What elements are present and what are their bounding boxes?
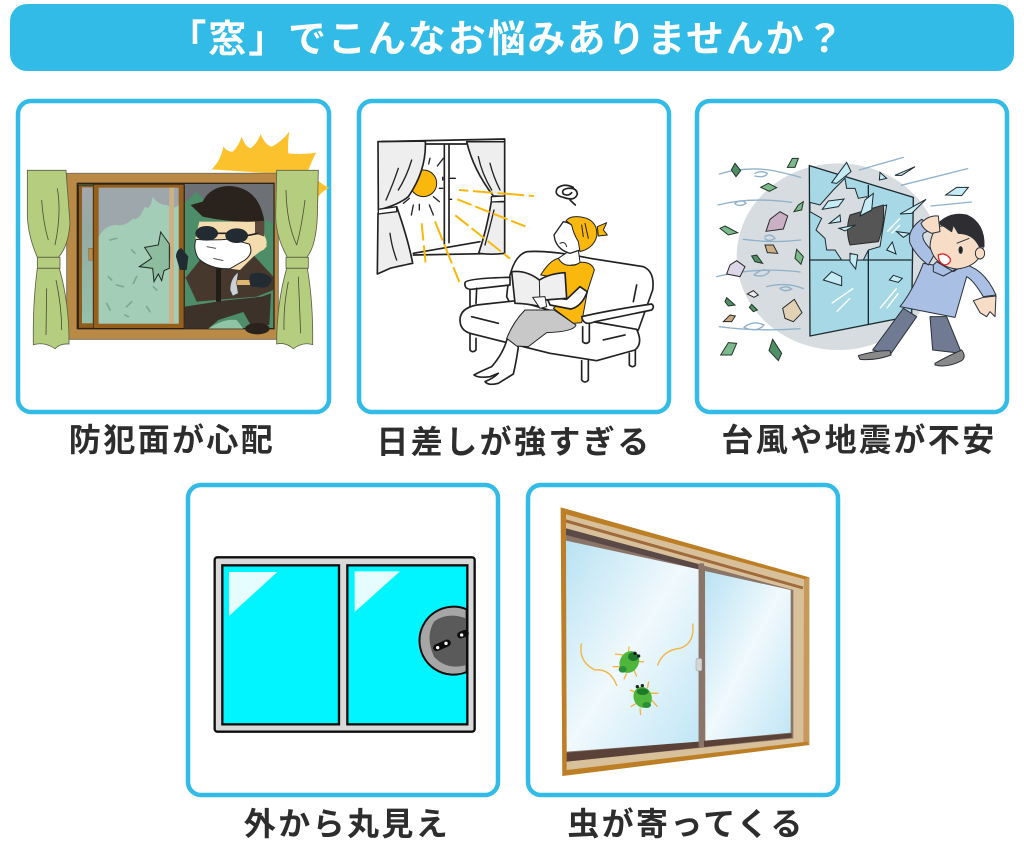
wind lines [717, 157, 971, 330]
flying object [847, 205, 884, 245]
label: security: 防犯面が心配 [69, 422, 275, 458]
man [858, 214, 996, 366]
panel: typhoon and earthquake [697, 101, 1007, 412]
hands and hammer [176, 248, 188, 270]
panel: visible from outside [188, 485, 498, 795]
woman torso [541, 258, 594, 323]
panel: strong sunlight [359, 101, 669, 412]
woman legs [474, 338, 518, 384]
label: sunlight: 日差しが強すぎる [376, 424, 652, 460]
title banner: 「窓」でこんなお悩みありませんか？ [168, 19, 846, 61]
label: bugs: 虫が寄ってくる [567, 806, 805, 842]
sofa arm [582, 304, 653, 323]
rays [422, 190, 534, 282]
woman head [554, 222, 580, 253]
illustration: storm breaking window [717, 157, 996, 366]
leaves [720, 158, 803, 361]
shattered hole [810, 178, 887, 260]
sunglasses [195, 226, 218, 241]
illustration: burglar at window [27, 132, 329, 349]
panel: security worry [18, 101, 329, 412]
illustration: window with peeping figure [215, 557, 475, 732]
peeping head [419, 607, 467, 675]
insects [613, 647, 658, 715]
burglar head [195, 222, 267, 270]
insect trails [581, 624, 693, 685]
curtains [378, 141, 425, 210]
window glass [809, 166, 913, 336]
cap [191, 186, 264, 222]
dizzy swirl [556, 185, 577, 205]
label: typhoon: 台風や地震が不安 [721, 422, 997, 458]
glass shards [822, 162, 968, 286]
sofa [507, 251, 653, 330]
illustration: window with insects [561, 507, 809, 776]
window [378, 139, 505, 255]
label: visible from outside: 外から丸見え [244, 806, 450, 842]
panel: bugs [528, 485, 838, 795]
book [512, 271, 567, 307]
debris [723, 212, 802, 322]
illustration: woman on sofa in sun [377, 139, 653, 384]
icon: broken glass [139, 232, 169, 282]
curtains [27, 170, 318, 349]
title banner [10, 4, 1014, 71]
sun [410, 170, 437, 197]
